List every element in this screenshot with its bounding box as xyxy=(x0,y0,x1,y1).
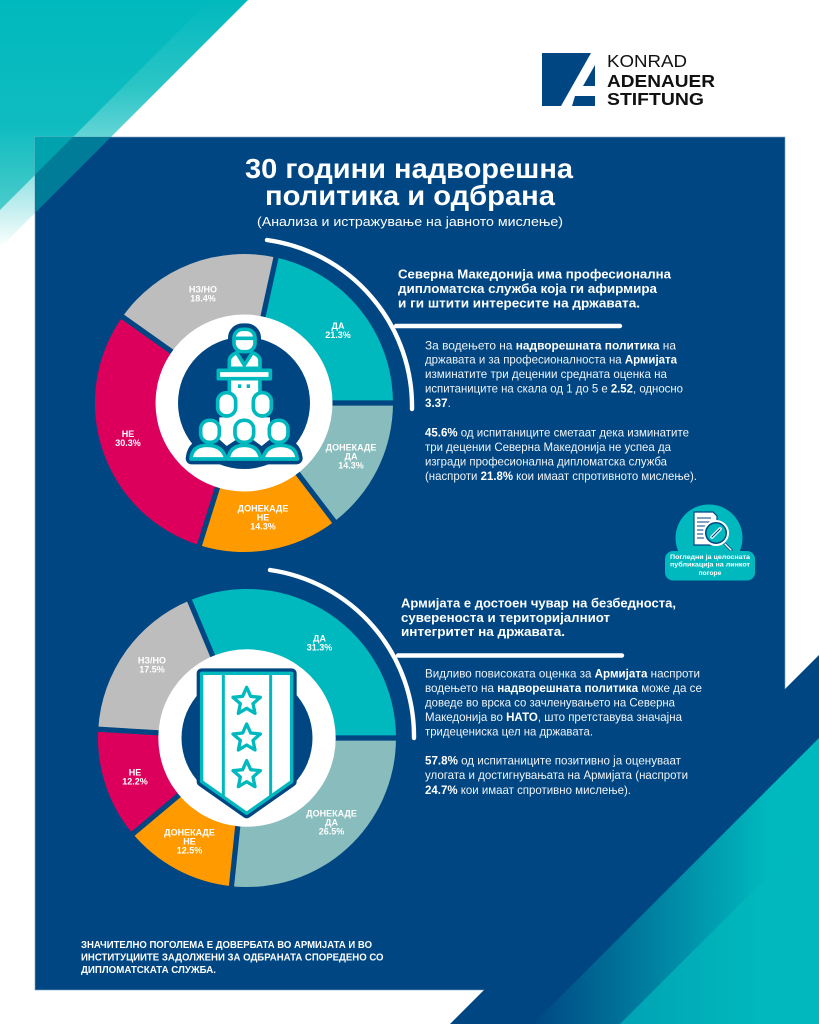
title: 30 години надворешна xyxy=(245,153,573,184)
label: ДОНЕКАДЕ ДА: ДОНЕКАДЕ xyxy=(326,442,376,452)
segment: ДА 31.3% xyxy=(190,589,396,738)
label: ДА: ДА xyxy=(332,321,345,331)
logo wordmark: KONRAD xyxy=(607,51,687,71)
icon: document with magnifier xyxy=(694,512,731,550)
callout teal circle xyxy=(676,504,742,572)
background triangle: top left xyxy=(0,0,248,248)
section two text: доведе во врска со зачленувањето на Северна xyxy=(425,696,676,710)
section two text: водењето на надворешната политика може да се xyxy=(425,682,702,695)
label: ДОНЕКАДЕ НЕ: 14.3% xyxy=(250,522,276,532)
section two text: 24.7% кои имаат спротивно мислење). xyxy=(425,784,631,797)
subtitle: (Анализа и истражување на јавното мислење) xyxy=(257,214,563,229)
donut chart: diplomatic service xyxy=(95,250,400,552)
label: ДА: 21.3% xyxy=(325,330,351,340)
icon: shield pennant with three stars xyxy=(202,673,292,813)
section two text: 57.8% од испитаниците позитивно ја оценуваат xyxy=(425,754,682,768)
section one text: 3.37. xyxy=(425,397,451,410)
segment: ДОНЕКАДЕ НЕ 12.5% xyxy=(132,738,247,886)
label: НЗ/НО: 17.5% xyxy=(139,664,165,674)
segment: НЗ/НО 18.4% xyxy=(122,254,276,403)
section one text: државата и за професионалноста на Армијата xyxy=(425,354,678,366)
section two text: Видливо повисоката оценка за Армијата наспроти xyxy=(425,668,700,680)
background triangles: bottom right xyxy=(450,655,819,1024)
footer note: ДИПЛОМАТСКАТА СЛУЖБА. xyxy=(81,965,216,976)
callout label box xyxy=(665,551,755,580)
section two heading: интегритет на државата. xyxy=(401,624,565,639)
label: НЕ: 30.3% xyxy=(115,438,141,448)
label: ДА: ДА xyxy=(313,634,326,644)
section one heading: дипломатска служба која ги афирмира xyxy=(398,281,658,296)
section one text: (наспроти 21.8% кои имаат спротивното мислење). xyxy=(425,470,697,483)
label: ДА: 31.3% xyxy=(307,642,332,652)
label: ДОНЕКАДЕ ДА: 14.3% xyxy=(338,460,364,470)
label: ДОНЕКАДЕ НЕ: ДОНЕКАДЕ xyxy=(164,828,215,838)
segment: ДА 21.3% xyxy=(244,258,393,403)
title xyxy=(245,153,573,211)
segment: ДОНЕКАДЕ ДА 14.3% xyxy=(244,403,393,522)
section two text: Македонија во НАТО, што претставува значајна xyxy=(425,711,683,724)
label: НЗ/НО: НЗ/НО xyxy=(189,284,217,294)
callout: full publication link xyxy=(665,504,755,580)
callout label text xyxy=(670,554,751,577)
logo: Konrad Adenauer Stiftung xyxy=(542,51,715,109)
arc and rule: section one xyxy=(267,240,620,409)
callout label text: погоре xyxy=(699,570,722,577)
label: НЗ/НО: 18.4% xyxy=(190,294,216,304)
section one text: испитаниците на скала од 1 до 5 е 2.52, односно xyxy=(425,382,683,396)
section two text: улогата и достигнувањата на Армијата (наспроти xyxy=(425,769,688,782)
callout label text: Погледни ја целосната xyxy=(670,554,750,561)
section two heading: Армијата е достоен чувар на безбедноста, xyxy=(401,596,676,610)
section two heading: сувереноста и територијалниот xyxy=(401,610,610,625)
section one heading: Северна Македонија има професионална xyxy=(398,266,672,282)
label: ДОНЕКАДЕ НЕ: НЕ xyxy=(183,836,196,846)
section one text: изминатите три децении средната оценка на xyxy=(425,368,668,381)
logo wordmark xyxy=(607,51,715,109)
logo mark xyxy=(542,53,595,106)
segment: НЗ/НО 17.5% xyxy=(98,600,247,738)
panel corner overlap with top-left triangle xyxy=(35,137,111,213)
label: ДОНЕКАДЕ ДА: ДА xyxy=(345,452,358,462)
section two text: тридецениска цел на државата. xyxy=(425,726,593,738)
arc and rule: section two xyxy=(270,570,622,738)
segment: НЕ 30.3% xyxy=(95,317,244,545)
section one heading xyxy=(398,266,672,310)
segment: НЕ 12.2% xyxy=(98,728,247,833)
section one text: три децении Северна Македонија не успеа да xyxy=(425,441,672,454)
title: политика и одбрана xyxy=(265,180,555,211)
section two text xyxy=(425,668,702,797)
label: НЗ/НО: НЗ/НО xyxy=(138,656,166,666)
label: НЕ: НЕ xyxy=(129,768,141,778)
icon: speaker at podium with audience xyxy=(191,329,297,459)
label: ДОНЕКАДЕ ДА: 26.5% xyxy=(319,826,344,836)
donut chart: army xyxy=(94,589,403,894)
section two heading xyxy=(401,596,676,639)
callout label text: публикација на линкот xyxy=(670,560,751,568)
main navy panel xyxy=(35,137,785,990)
section one heading: и ги штити интересите на државата. xyxy=(398,296,640,310)
label: ДОНЕКАДЕ НЕ: НЕ xyxy=(257,512,269,522)
label: ДОНЕКАДЕ ДА: ДОНЕКАДЕ xyxy=(306,808,357,818)
logo wordmark: STIFTUNG xyxy=(607,89,704,109)
logo wordmark: ADENAUER xyxy=(607,71,715,91)
segment: ДОНЕКАДЕ ДА 26.5% xyxy=(231,738,396,887)
label: ДОНЕКАДЕ ДА: ДА xyxy=(325,818,338,828)
label: ДОНЕКАДЕ НЕ: 12.5% xyxy=(177,846,202,856)
segment: ДОНЕКАДЕ НЕ 14.3% xyxy=(199,403,334,552)
label: НЕ: 12.2% xyxy=(122,776,148,786)
section one text: 45.6% од испитаниците сметаат дека изминатите xyxy=(425,426,689,440)
footer note: ИНСТИТУЦИИТЕ ЗАДОЛЖЕНИ ЗА ОДБРАНАТА СПОРЕДЕНО СО xyxy=(81,952,384,964)
footer note: ЗНАЧИТЕЛНО ПОГОЛЕМА Е ДОВЕРБАТА ВО АРМИЈАТА И ВО xyxy=(81,940,372,951)
section one text: изгради професионална дипломатска служба xyxy=(425,456,668,468)
section one text: За водењето на надворешната политика на xyxy=(425,340,677,352)
label: ДОНЕКАДЕ НЕ: ДОНЕКАДЕ xyxy=(238,504,288,514)
footer note xyxy=(81,940,384,976)
label: НЕ: НЕ xyxy=(122,429,134,439)
section one text xyxy=(425,340,697,483)
